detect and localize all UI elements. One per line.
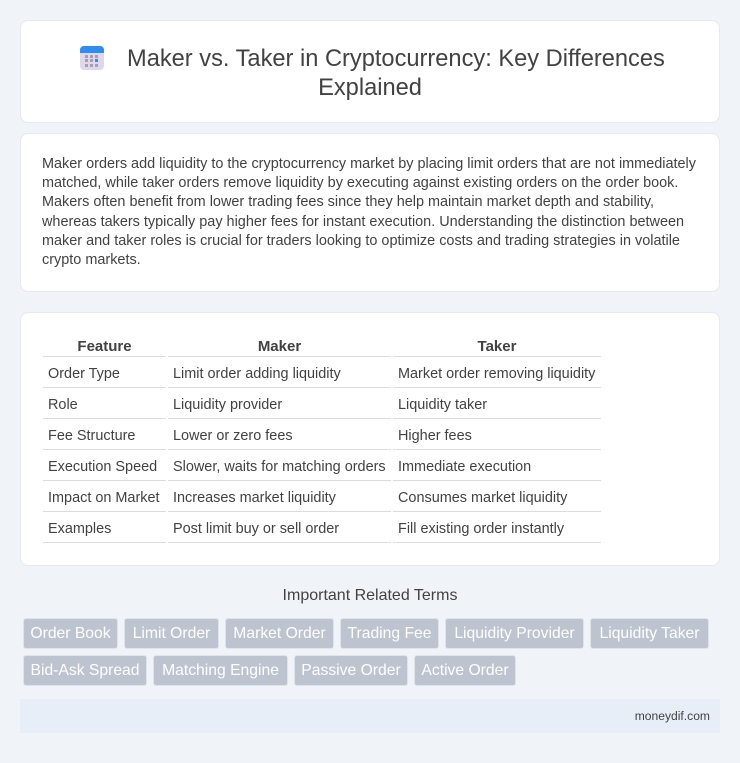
footer source text: moneydif.com [635,709,710,723]
intro paragraph: crypto markets. [42,252,141,268]
related term tags: Active Order [421,662,509,679]
comparison table: Post limit buy or sell order [173,521,339,537]
related term tags: Passive Order [301,662,401,679]
comparison table: Taker [478,338,516,355]
comparison table [43,338,601,543]
related term tags: Bid-Ask Spread [30,662,140,679]
related term tags: Liquidity Taker [600,625,700,642]
title: Explained [318,75,422,101]
comparison table: Lower or zero fees [173,428,293,444]
related term tags: Market Order [233,625,326,642]
comparison table: Impact on Market [48,490,160,506]
footer bar [20,699,720,733]
intro paragraph: Maker orders add liquidity to the cryptocurrency market by placing limit orders that are not immediately [42,156,696,172]
comparison table: Liquidity provider [173,397,282,413]
comparison table: Execution Speed [48,459,157,475]
intro paragraph: whereas takers typically pay higher fees for instant execution. Understanding the distinction between [42,214,684,230]
related term tags [23,618,709,686]
comparison table: Higher fees [398,428,472,444]
comparison table: Consumes market liquidity [398,490,567,506]
icon: calendar [80,46,104,70]
comparison table: Fill existing order instantly [398,521,564,537]
intro paragraph: maker and taker roles is crucial for traders looking to optimize costs and trading strategies in volatile [42,233,680,249]
related term tags: Order Book [30,625,111,642]
comparison table: Role [48,397,78,413]
related term tags: Liquidity Provider [454,625,575,642]
intro text panel [20,133,720,292]
comparison table: Increases market liquidity [173,490,336,506]
comparison table: Slower, waits for matching orders [173,459,386,475]
comparison table: Market order removing liquidity [398,366,595,382]
comparison table: Order Type [48,366,120,382]
related term tags: Trading Fee [348,625,432,642]
comparison table: Fee Structure [48,428,135,444]
intro paragraph [42,156,696,268]
comparison table: Maker [258,338,301,355]
comparison table: Immediate execution [398,459,531,475]
comparison table panel [20,312,720,566]
comparison table: Liquidity taker [398,397,487,413]
related terms heading: Important Related Terms [283,587,457,604]
related term tags: Limit Order [133,625,210,642]
title: Maker vs. Taker in Cryptocurrency: Key Differences [127,46,665,72]
comparison table: Limit order adding liquidity [173,366,341,382]
comparison table: Feature [77,338,132,355]
intro paragraph: matched, while taker orders remove liquidity by executing against existing orders on the order book. [42,175,678,191]
intro paragraph: Makers often benefit from lower trading fees since they help maintain market depth and stability, [42,194,654,210]
header panel [20,20,720,123]
comparison table: Examples [48,521,111,537]
title [127,46,665,101]
related term tags: Matching Engine [162,662,279,679]
